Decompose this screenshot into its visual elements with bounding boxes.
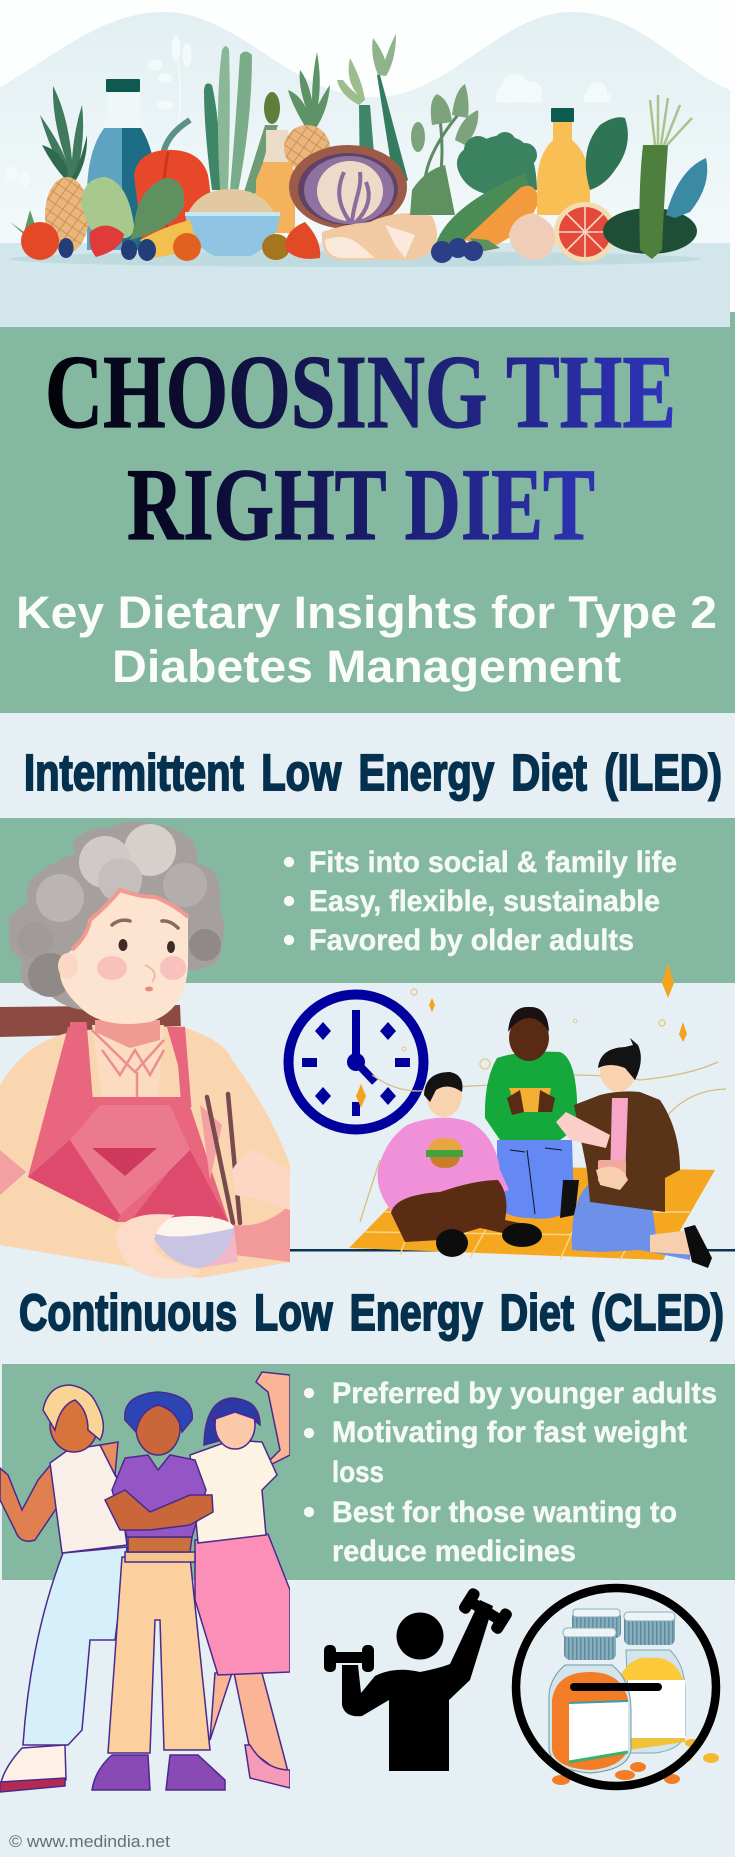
burger [426,1138,463,1168]
bullet list [284,846,677,957]
zucchini and carrot [436,173,539,252]
bullet list: Preferred by younger adults [332,1377,717,1410]
loose pills [552,1739,719,1785]
bullet list: Fits into social & family life [309,846,677,879]
hand holding bowl [115,1214,200,1278]
right woman [190,1372,290,1788]
rice bowl [185,189,280,256]
small fruit centre [262,222,320,260]
icon: clock [288,994,424,1130]
pink sleeve shadow [0,1105,222,1195]
scarf band [0,1005,181,1037]
oil bottle small [256,130,295,233]
pill bottle orange [549,1628,631,1773]
leafy plant [410,84,478,215]
fruit left row [10,210,201,261]
clouds [496,74,610,103]
apron [28,1027,229,1223]
pineapple centre [284,52,330,171]
icon: person lifting dumbbells [324,1586,514,1771]
bullet list: Motivating for fast weight [332,1416,687,1449]
main title: RIGHT DIET [127,448,595,562]
subtitle: Diabetes Management [112,641,621,692]
picnic mat [349,1165,715,1260]
hair [9,821,224,1012]
grapefruit [554,202,616,262]
ground line [230,1249,735,1252]
rice bowl [150,1216,238,1268]
shirt collar [92,1025,164,1100]
illustration: friends having a picnic [349,1007,715,1268]
bullet list: reduce medicines [332,1535,576,1568]
sparkles and decorative waves [356,963,726,1222]
bullet list [304,1377,717,1568]
cucumber with fringe [639,95,692,259]
title panel [0,327,735,713]
bullet list: Favored by older adults [309,924,634,957]
ring and minus sign [516,1588,716,1786]
footer credit: © www.medindia.net [9,1832,170,1851]
chopsticks [207,1094,240,1223]
pill bottle yellow [618,1612,685,1753]
hand right [232,1148,290,1210]
lettuce [457,132,537,195]
bullet list: loss [332,1456,384,1489]
bread [322,213,437,260]
man in green [485,1007,579,1219]
main title [45,333,676,562]
teal leaf [666,158,707,218]
fig [509,213,556,260]
left woman [0,1385,127,1792]
bullet list: Best for those wanting to [332,1496,677,1529]
illustration: three younger women [0,1372,290,1792]
woman in brown jacket [556,1038,712,1268]
panel: CLED benefits [2,1364,735,1580]
centre woman [92,1392,225,1790]
illustration: older woman eating [0,821,290,1278]
pineapple left [40,86,89,253]
body [0,1026,290,1278]
panel: ILED benefits [0,818,735,983]
man in pink hoodie [378,1072,542,1257]
pear [81,177,134,238]
pill bottle back [572,1609,621,1638]
dark leaf [586,117,628,190]
icon: reduce medicines [516,1588,719,1786]
green stalks [204,46,280,195]
purple cabbage [289,145,407,229]
subtitle: Key Dietary Insights for Type 2 [16,587,717,638]
face [58,890,188,1048]
subtitle [16,587,717,692]
tall leek stalks [337,34,408,190]
dark zucchini [603,208,697,254]
orange bottle [537,108,590,215]
faint sprigs [6,36,191,190]
bottle left [87,79,157,250]
banner illustration: healthy foods [0,0,735,327]
red pepper [134,120,211,240]
blueberries [431,238,483,263]
bullet list: Easy, flexible, sustainable [309,885,660,918]
green leaf [130,178,184,240]
